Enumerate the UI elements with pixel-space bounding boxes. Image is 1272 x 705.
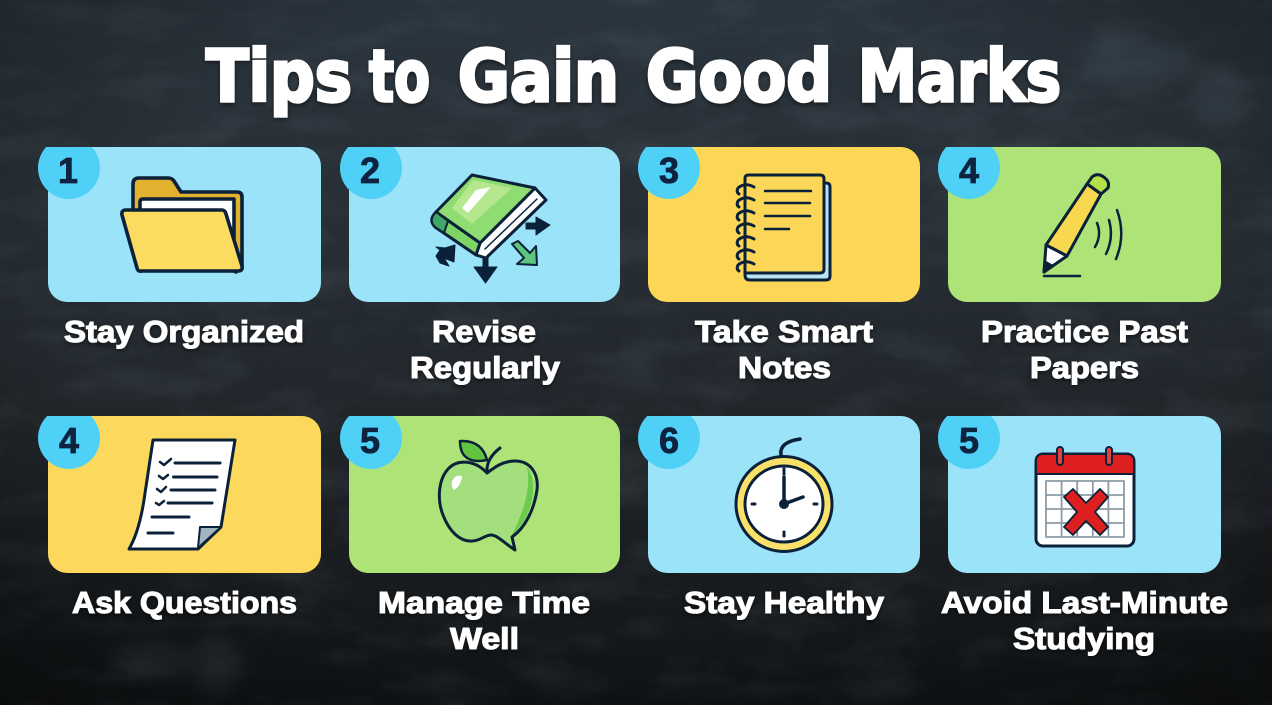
icon: clock — [736, 439, 832, 552]
label: Avoid Last-Minute Studying: Studying — [1013, 621, 1155, 656]
title — [206, 35, 1061, 118]
number badge 6: 6 — [659, 420, 679, 461]
number badge 6 — [638, 416, 700, 469]
label: Take Smart Notes: Take Smart — [695, 314, 873, 349]
number badge 3 — [638, 147, 700, 199]
title: Marks — [858, 35, 1061, 118]
panel: Stay Healthy — [638, 407, 920, 620]
number badge 5: 5 — [959, 420, 979, 461]
card 1 background — [48, 147, 321, 302]
title: Good — [646, 35, 832, 118]
panel: Manage Time Well — [340, 407, 620, 656]
icon: calendar with red X — [1036, 447, 1134, 546]
number badge 4 — [38, 416, 100, 469]
label: Practice Past Papers: Papers — [1030, 350, 1139, 385]
label: Avoid Last-Minute Studying — [941, 585, 1228, 656]
label: Avoid Last-Minute Studying: Avoid Last-Minute — [941, 585, 1228, 620]
label: Stay Organized: Stay Organized — [64, 314, 304, 349]
icon: folder — [122, 178, 242, 272]
icon: pencil writing — [1044, 175, 1121, 276]
icon: green apple — [439, 441, 537, 550]
label: Manage Time Well: Manage Time — [378, 585, 590, 620]
panel: Revise Regularly — [340, 137, 620, 385]
number badge 3: 3 — [659, 150, 679, 191]
panel: Take Smart Notes — [638, 137, 920, 385]
card 5 background — [48, 416, 321, 573]
title: to — [369, 35, 430, 118]
panel: Stay Organized — [38, 137, 321, 349]
number badge 4 — [938, 147, 1000, 199]
card 8 background — [948, 416, 1221, 573]
label: Stay Healthy: Stay Healthy — [684, 585, 885, 620]
number badge 2 — [340, 147, 402, 199]
label: Revise Regularly: Revise — [432, 314, 536, 349]
label: Revise Regularly — [410, 314, 561, 385]
number badge 5 — [938, 416, 1000, 469]
label: Revise Regularly: Regularly — [410, 350, 561, 385]
label: Practice Past Papers — [981, 314, 1188, 385]
card 2 background — [349, 147, 620, 302]
label: Manage Time Well — [378, 585, 590, 656]
card 6 background — [349, 416, 620, 573]
label: Practice Past Papers: Practice Past — [981, 314, 1188, 349]
label: Take Smart Notes: Notes — [738, 350, 831, 385]
label: Manage Time Well: Well — [450, 621, 519, 656]
number badge 4: 4 — [959, 150, 979, 191]
icon: checklist page — [129, 440, 235, 549]
title: Tips — [206, 35, 352, 118]
title: Gain — [458, 35, 619, 118]
panel: Ask Questions — [38, 407, 321, 620]
card 4 background — [948, 147, 1221, 302]
panel: Practice Past Papers — [938, 137, 1221, 385]
card 7 background — [648, 416, 920, 573]
icon: book with arrows — [432, 175, 550, 283]
number badge 2: 2 — [360, 150, 380, 191]
number badge 5 — [340, 416, 402, 469]
number badge 1: 1 — [58, 150, 78, 191]
card 3 background — [648, 147, 920, 302]
number badge 4: 4 — [59, 420, 79, 461]
number badge 5: 5 — [360, 420, 380, 461]
icon: spiral notebook — [737, 175, 830, 280]
label: Ask Questions: Ask Questions — [72, 585, 297, 620]
number badge 1 — [38, 147, 100, 199]
label: Take Smart Notes — [695, 314, 873, 385]
panel: Avoid Last-Minute Studying — [938, 407, 1228, 656]
